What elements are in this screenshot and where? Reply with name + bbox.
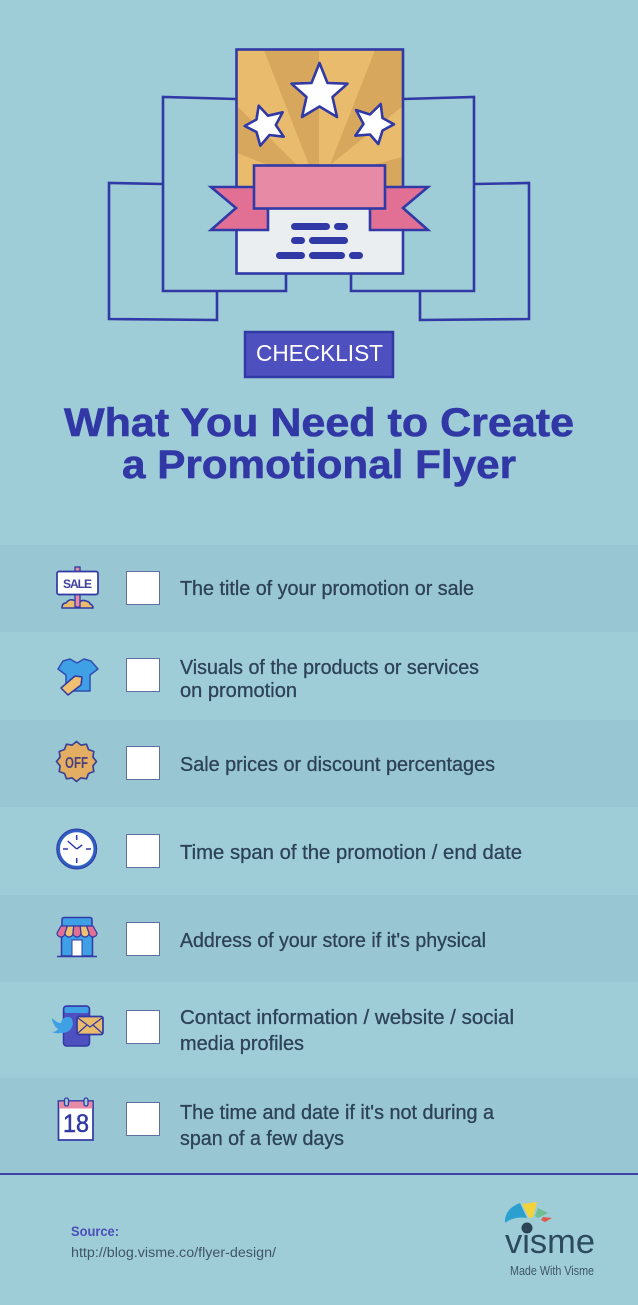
main flyer outline <box>236 50 403 274</box>
text 3: Sale prices or discount percentages <box>180 754 495 776</box>
title <box>64 401 574 487</box>
checklist item 5 <box>57 918 486 956</box>
text 5: Address of your store if it's physical <box>180 930 486 952</box>
checkbox 7 <box>126 1102 160 1136</box>
back flyers outlines <box>109 97 529 320</box>
checklist badge: CHECKLIST <box>256 340 383 366</box>
hero illustration: stacked flyers <box>109 50 529 320</box>
checkbox 4 <box>126 834 160 868</box>
checklist item 7 <box>58 1098 495 1150</box>
text 7: The time and date if it's not during a <box>180 1102 495 1124</box>
text 6: Contact information / website / social <box>180 1007 514 1029</box>
star: right <box>355 104 394 144</box>
logo mark <box>505 1202 552 1234</box>
icon: calendar: 18 <box>63 1110 89 1138</box>
source <box>71 1224 276 1260</box>
checkbox 1 <box>126 572 160 604</box>
checklist item 3 <box>56 742 495 782</box>
checklist badge <box>245 332 393 377</box>
text 7 <box>180 1102 495 1150</box>
main flyer lower white panel <box>237 190 403 273</box>
title: What You Need to Create <box>64 401 574 445</box>
source: http://blog.visme.co/flyer-design/ <box>71 1245 276 1260</box>
flyer text lines <box>276 223 363 259</box>
icon: store <box>57 918 97 956</box>
text 2 <box>180 657 479 702</box>
text 6 <box>180 1007 514 1055</box>
text 7: span of a few days <box>180 1128 344 1150</box>
checklist item 1 <box>57 567 474 608</box>
checkbox 5 <box>126 922 160 956</box>
text 2: Visuals of the products or services <box>180 657 479 679</box>
star: center <box>292 63 348 117</box>
source: Source: <box>71 1224 119 1239</box>
text 1: The title of your promotion or sale <box>180 578 474 600</box>
icon: off badge <box>56 742 96 782</box>
checkbox 3 <box>126 746 160 780</box>
checklist bands <box>0 545 638 1173</box>
text 4: Time span of the promotion / end date <box>180 842 522 864</box>
visme logo <box>505 1202 595 1278</box>
ribbon center <box>254 166 385 208</box>
checklist item 6 <box>52 1006 514 1055</box>
icon: sale sign <box>57 567 98 608</box>
icon: t-shirt with tag <box>58 659 98 695</box>
made with visme: Made With Visme <box>510 1263 594 1278</box>
checklist item 2 <box>58 657 479 702</box>
checkbox 2 <box>126 658 160 692</box>
icon: off badge: OFF <box>65 755 88 772</box>
logo wordmark: visme <box>505 1223 595 1261</box>
icon: phone, bird, envelope <box>52 1006 103 1046</box>
icon: clock <box>57 829 97 869</box>
star: left <box>245 106 284 146</box>
text 6: media profiles <box>180 1033 304 1055</box>
main flyer golden panel with rays <box>237 50 403 190</box>
icon: sale sign: SALE <box>63 577 92 591</box>
footer divider <box>0 1173 638 1175</box>
icon: calendar <box>58 1098 93 1140</box>
ribbon tails <box>211 187 428 230</box>
checkbox 6 <box>126 1010 160 1044</box>
text 2: on promotion <box>180 680 297 702</box>
checklist item 4 <box>57 829 522 869</box>
title: a Promotional Flyer <box>122 443 516 487</box>
